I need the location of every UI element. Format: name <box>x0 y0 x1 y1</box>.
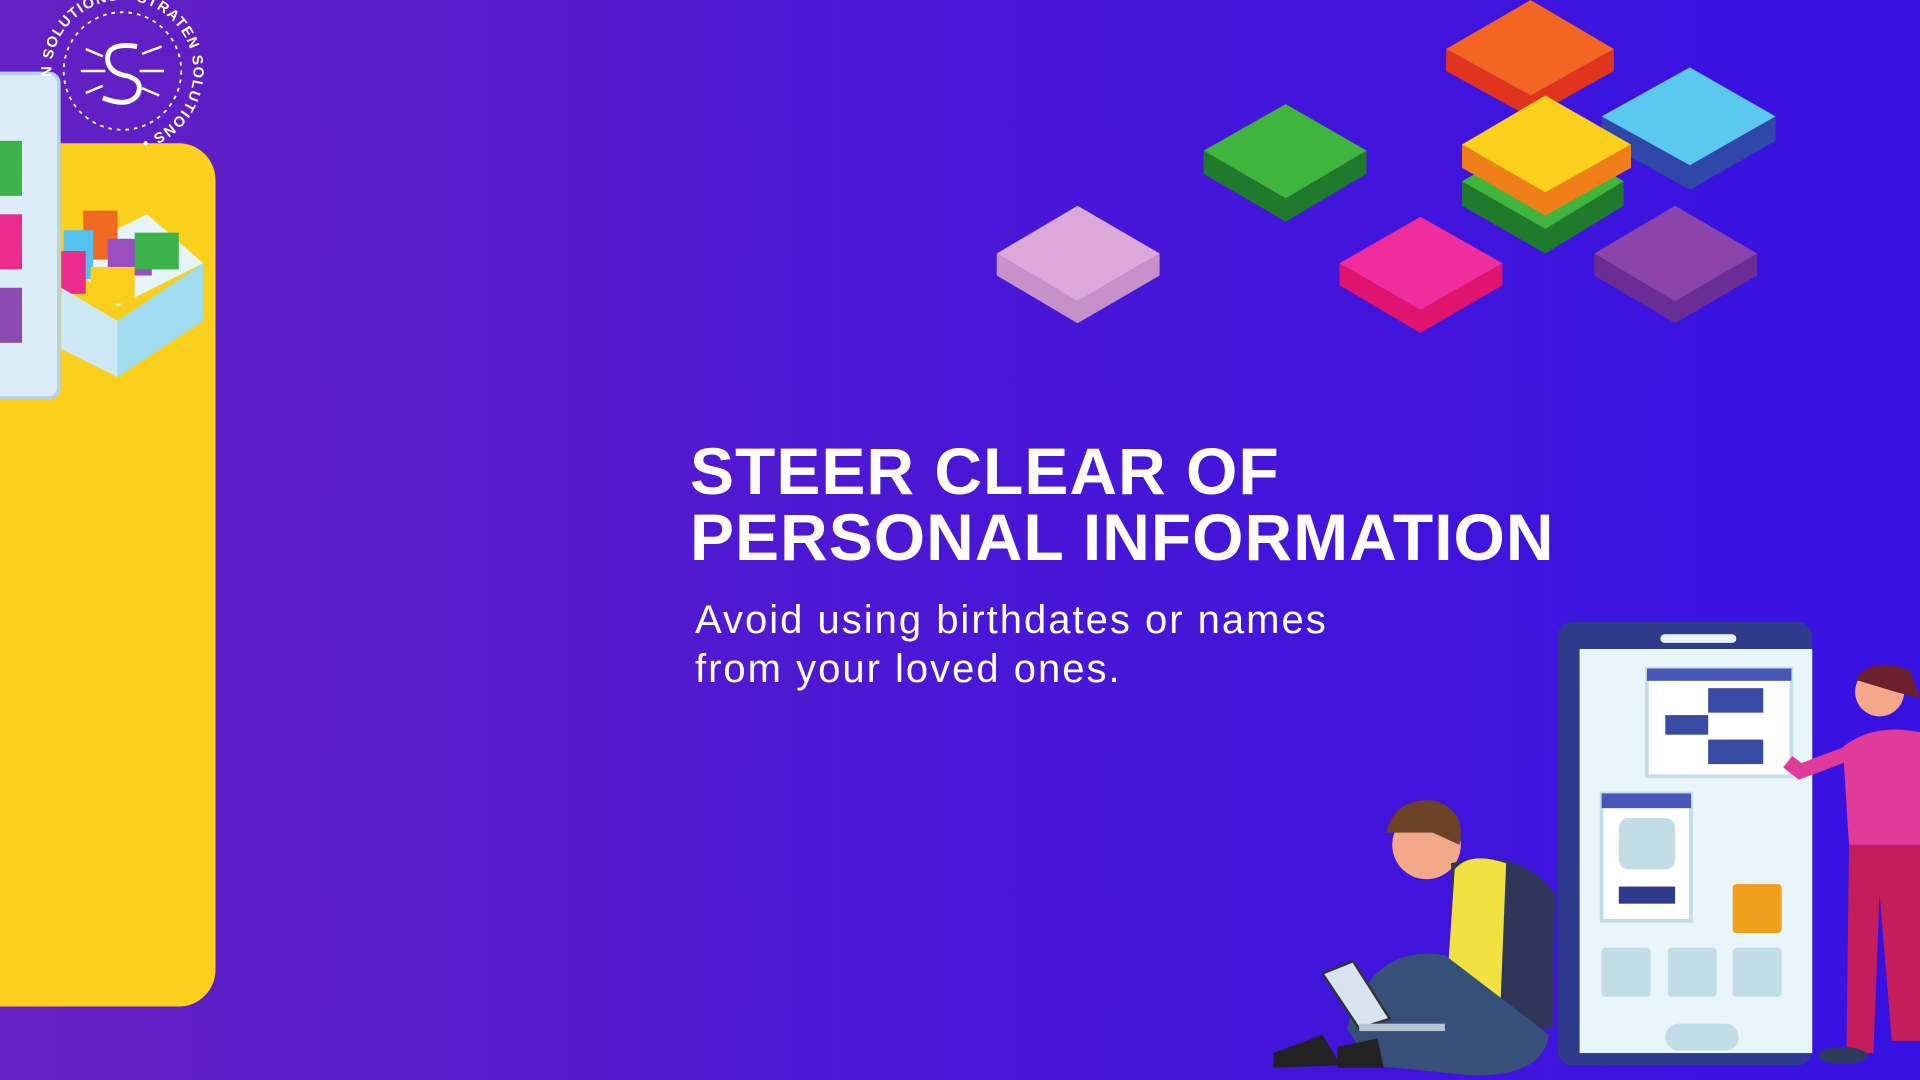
panel: yellow side card <box>0 143 216 1007</box>
icon: big phone with chat <box>1558 622 1812 1065</box>
subtitle text <box>695 598 1328 691</box>
icon: standing woman <box>1788 665 1920 1064</box>
subtitle text: Avoid using birthdates or names <box>695 598 1328 642</box>
title <box>690 434 1555 574</box>
icon: sitting man with laptop <box>1273 800 1555 1075</box>
title: STEER CLEAR OF <box>690 434 1280 508</box>
title: PERSONAL INFORMATION <box>690 500 1555 574</box>
subtitle text: from your loved ones. <box>695 647 1122 691</box>
icon: isometric tiles <box>997 0 1776 333</box>
icon: left phone with shelves <box>0 73 203 398</box>
